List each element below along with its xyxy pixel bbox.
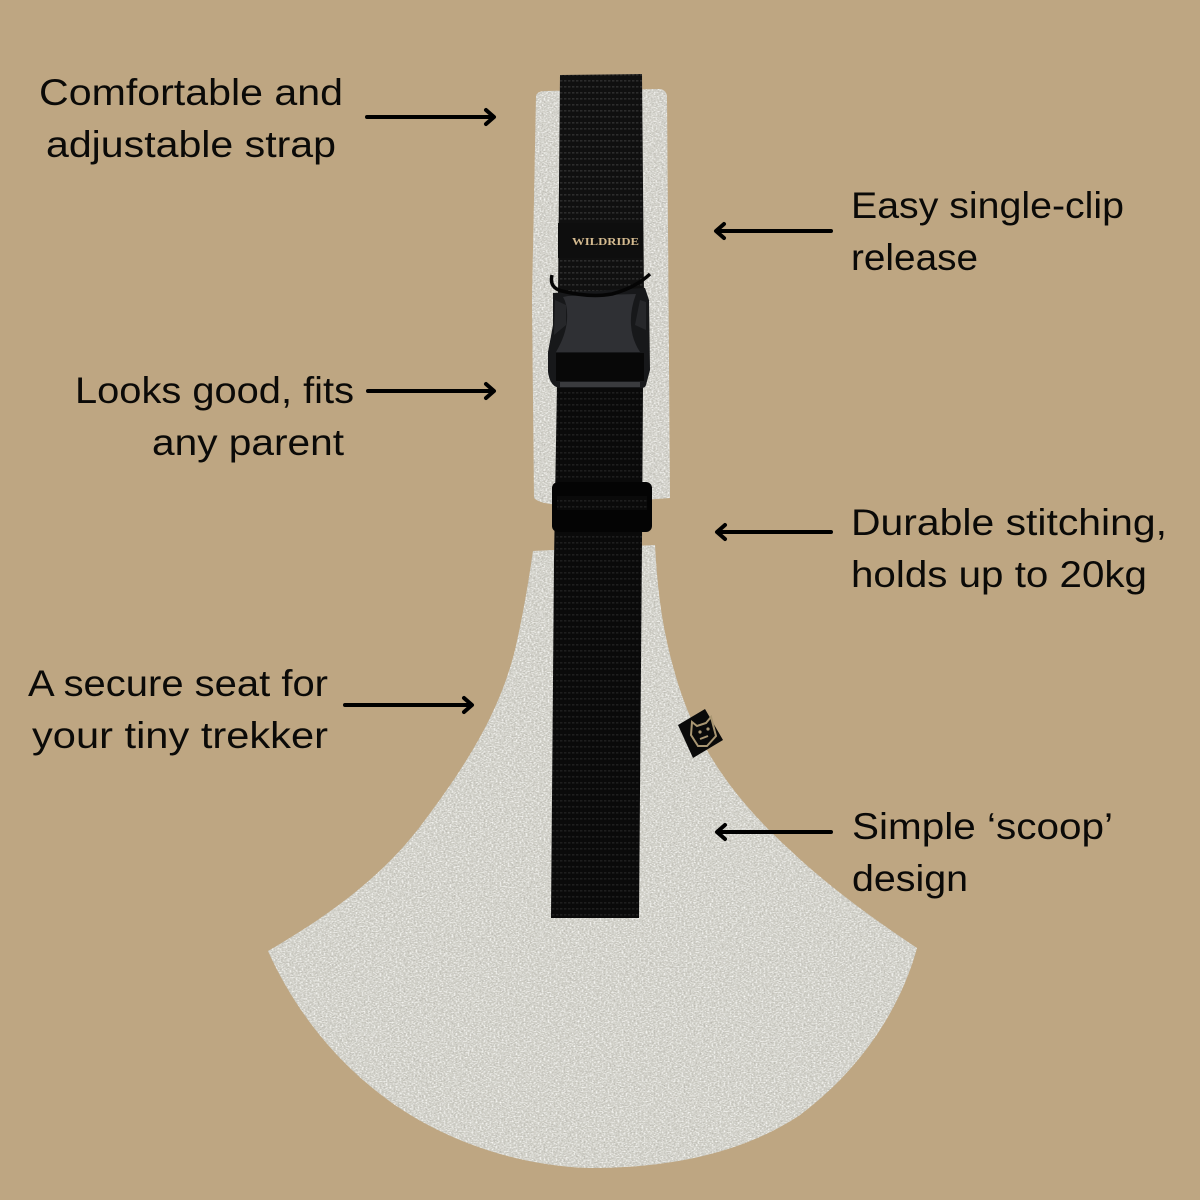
- label: secure seat: [28, 663, 328, 756]
- label: fits any parent: [75, 370, 354, 463]
- label: secure seat: your tiny trekker: [32, 715, 328, 756]
- label: durable stitching: Durable stitching,: [851, 502, 1167, 543]
- scoop seat fabric: [268, 545, 917, 1168]
- arrow: single-clip release: [716, 224, 831, 238]
- label: scoop design: design: [852, 858, 968, 899]
- padded shoulder strap: [532, 89, 670, 505]
- label: comfortable strap: [39, 72, 343, 165]
- label: scoop design: Simple ‘scoop’: [852, 806, 1113, 847]
- label: scoop design: [852, 806, 1113, 899]
- label: single-clip release: Easy single-clip: [851, 185, 1124, 226]
- brand label: WILDRIDE: [572, 236, 639, 248]
- brand label: [558, 223, 643, 258]
- webbing strap upper: [558, 74, 644, 296]
- label: fits any parent: Looks good, fits: [75, 370, 354, 411]
- label: durable stitching: [851, 502, 1167, 595]
- label: fits any parent: any parent: [152, 422, 345, 463]
- sling product illustration: [268, 74, 917, 1168]
- slider adjuster: [552, 482, 652, 532]
- label: durable stitching: holds up to 20kg: [851, 554, 1147, 595]
- label: comfortable strap: adjustable strap: [46, 124, 336, 165]
- label: secure seat: A secure seat for: [28, 663, 328, 704]
- webbing strap lower: [551, 385, 643, 918]
- label: single-clip release: [851, 185, 1124, 278]
- arrow: scoop design: [717, 825, 831, 839]
- arrow: secure seat: [345, 698, 472, 712]
- label: single-clip release: release: [851, 237, 978, 278]
- arrow: durable stitching: [717, 525, 831, 539]
- logo patch: [678, 709, 723, 758]
- arrow: comfortable strap: [367, 110, 494, 124]
- side release buckle: [548, 274, 650, 388]
- arrow: fits any parent: [368, 384, 494, 398]
- label: comfortable strap: Comfortable and: [39, 72, 343, 113]
